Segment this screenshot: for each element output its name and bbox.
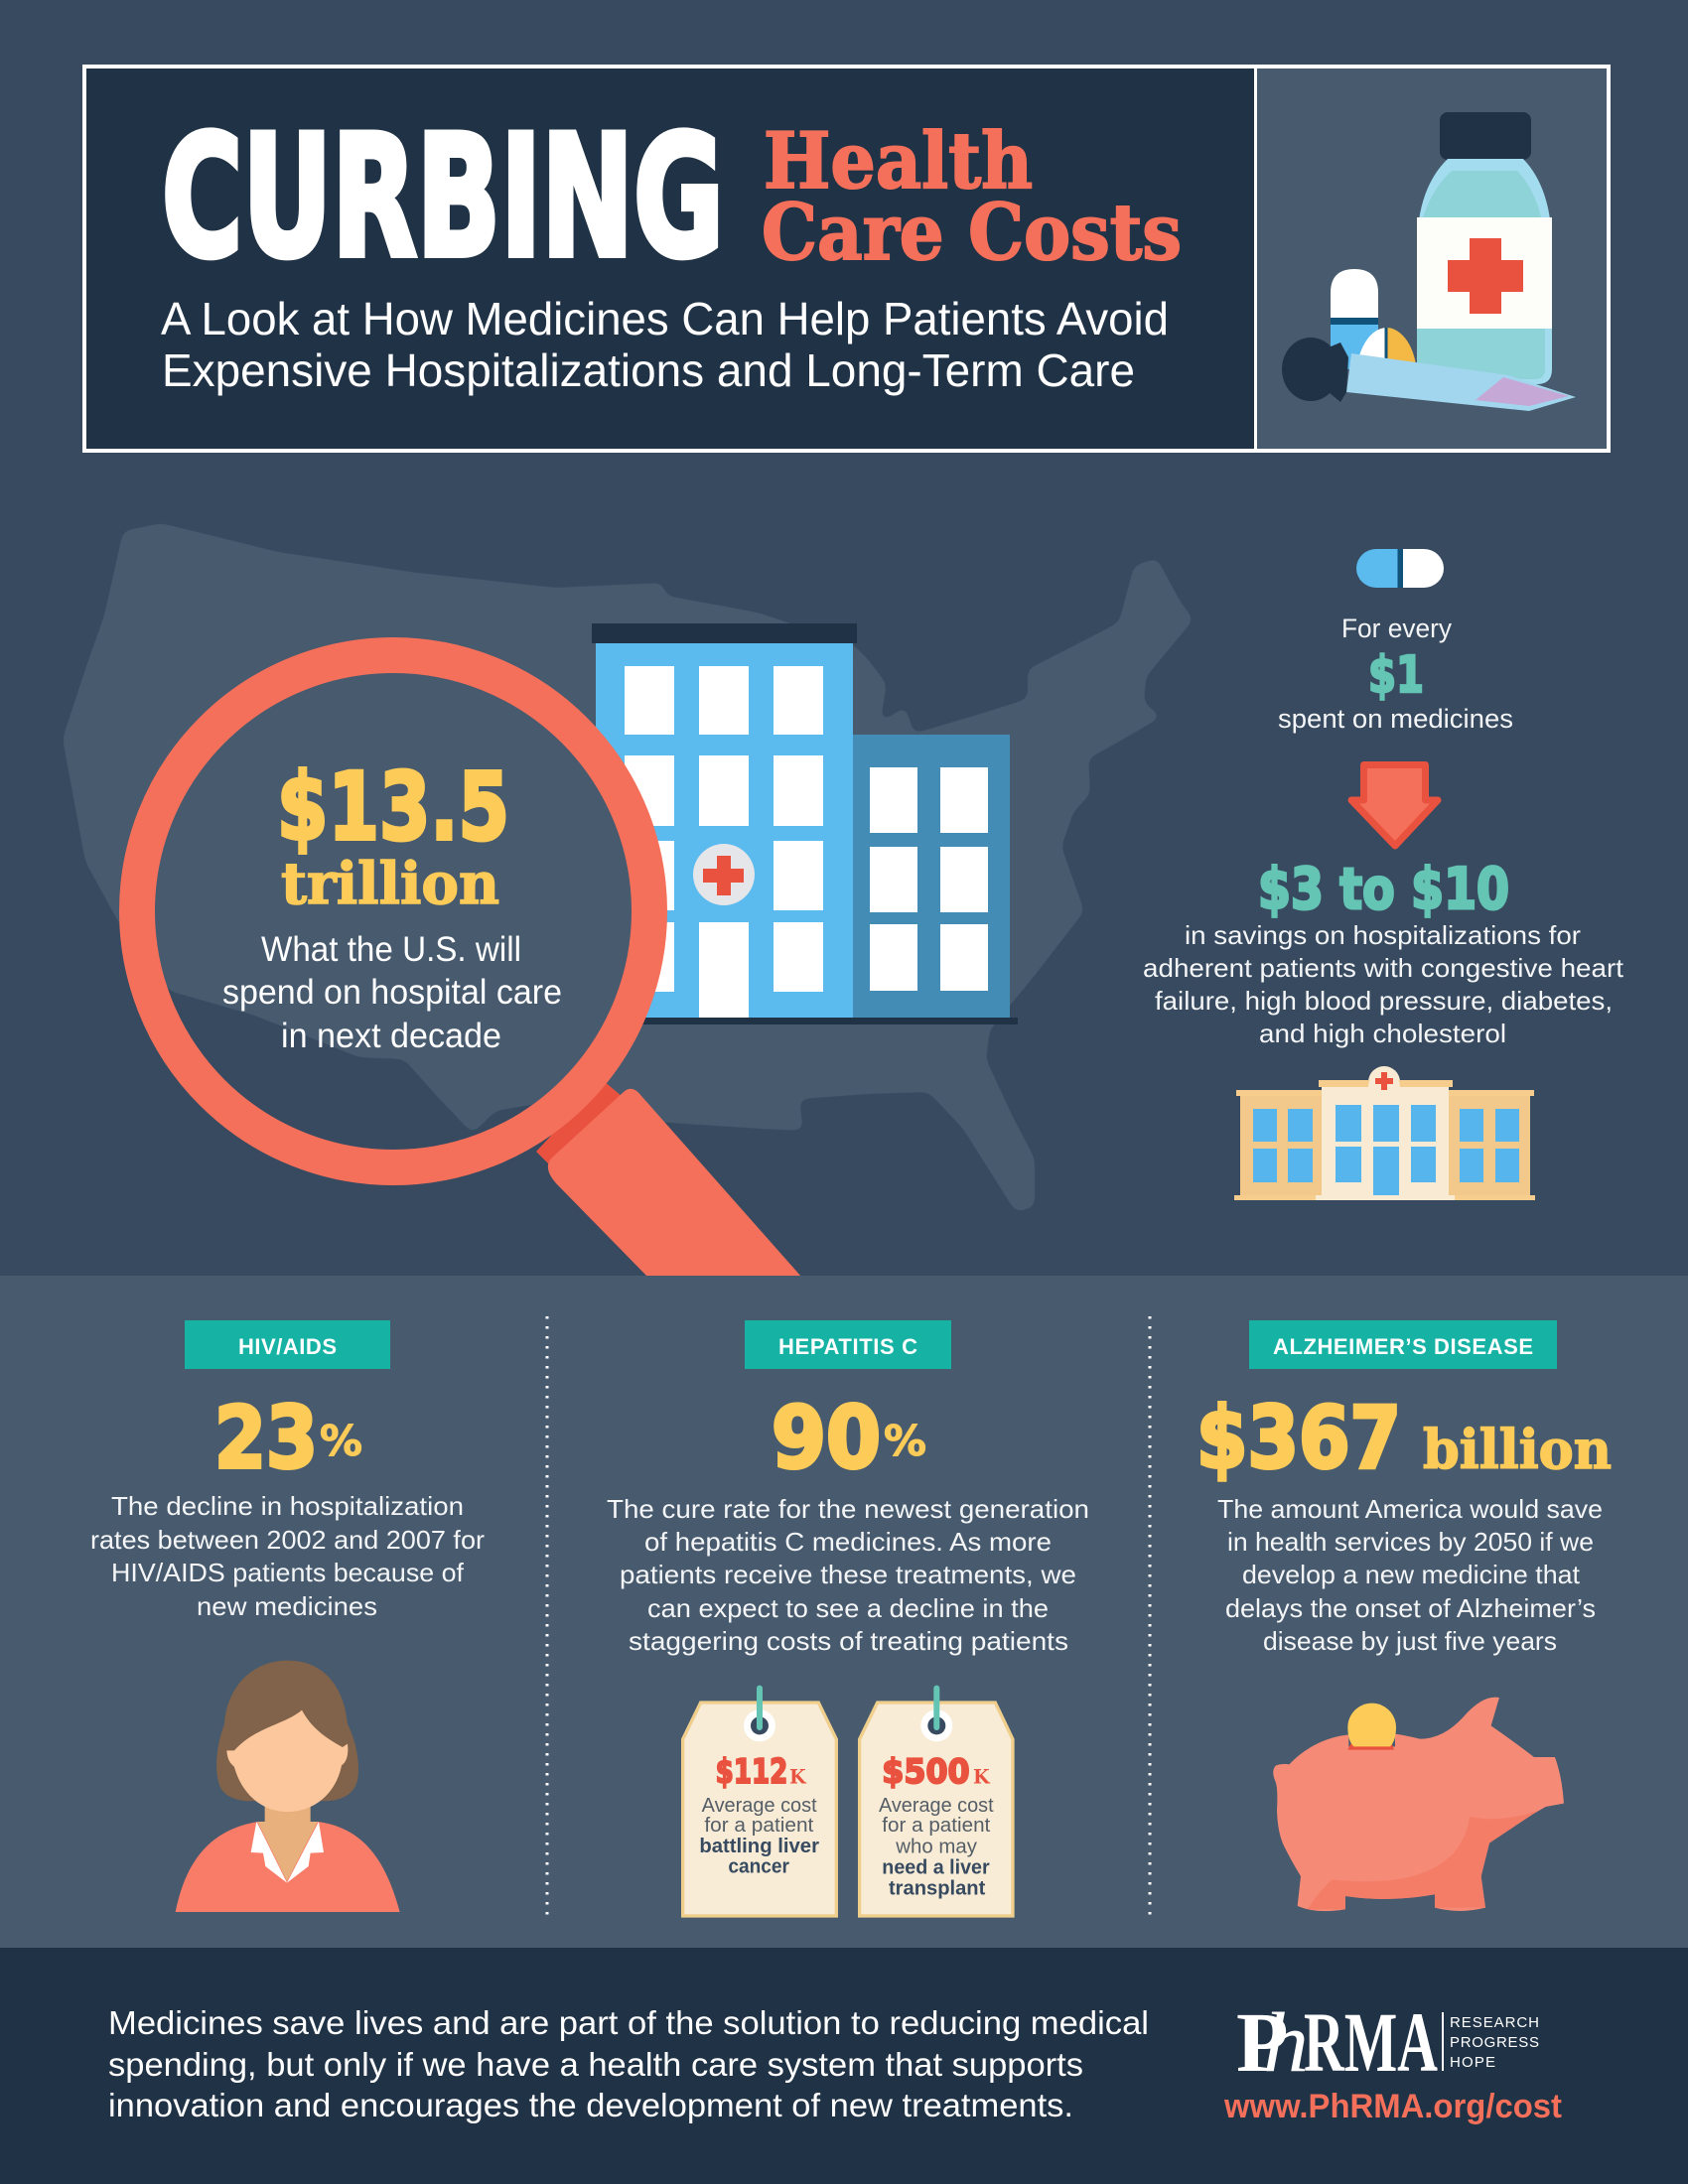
stat: 23 percent: % (320, 1417, 362, 1465)
text: hepatitis description: of hepatitis C medicines. As more (644, 1527, 1052, 1557)
subtitle (161, 293, 1169, 396)
text: savings description: and high cholesterol (1259, 1019, 1506, 1048)
panel: Alzheimer's disease (1196, 1320, 1612, 1911)
icon: piggy bank (1273, 1698, 1564, 1911)
stat: 13.5 trillion: $13.5 (277, 753, 509, 862)
arrow: down (1351, 764, 1438, 846)
price tag: 500K: K (973, 1766, 991, 1789)
text: Alzheimer's description: delays the onset of Alzheimer’s (1225, 1593, 1596, 1623)
title: health care costs (762, 116, 1182, 278)
panel: savings on medicines (1143, 549, 1624, 1200)
price tag: 500K (860, 1689, 1013, 1916)
title: curbing: CURBING (162, 99, 724, 294)
text: for every 1 dollar: For every (1341, 614, 1452, 643)
title: health care costs: Care Costs (762, 188, 1182, 278)
price tag: 112K: cancer (728, 1855, 789, 1878)
text: hepatitis description: patients receive these treatments, we (620, 1560, 1076, 1589)
price tag: 500K: transplant (889, 1876, 985, 1899)
text: hepatitis description: can expect to see a decline in the (647, 1593, 1049, 1623)
stat: 3 to 10 dollars: $3 to $10 (1258, 857, 1509, 922)
price tag: 112K: $112 (716, 1752, 787, 1792)
icon: capsule (1356, 549, 1444, 588)
text: Alzheimer's description (1217, 1494, 1603, 1656)
icon: magnifying glass (119, 637, 800, 1276)
title: health care costs: Health (764, 116, 1033, 206)
stat: 13.5 trillion: trillion (281, 850, 499, 917)
subtitle: Expensive Hospitalizations and Long-Term Care (162, 344, 1135, 396)
price tag: 112K: for a patient (704, 1814, 814, 1837)
header title background (84, 67, 1609, 451)
stat: 13.5 trillion: What the U.S. will (261, 930, 521, 969)
stat: 367 billion (1196, 1389, 1612, 1488)
text: HIV description: rates between 2002 and 2007 for (90, 1525, 485, 1555)
price tag: 112K: K (789, 1766, 807, 1789)
icon: woman patient (176, 1661, 400, 1912)
header frame (84, 67, 1609, 451)
stat: 90 percent: 90 (772, 1389, 881, 1488)
stat: 13.5 trillion (222, 753, 562, 1055)
stat: 13.5 trillion: spend on hospital care (222, 973, 562, 1012)
text: HIV description: new medicines (197, 1591, 377, 1621)
stat: 13.5 trillion: in next decade (281, 1017, 501, 1055)
panel: disease statistics band (0, 1276, 1688, 1948)
price tag: 500K: who may (895, 1836, 978, 1858)
subtitle: A Look at How Medicines Can Help Patients Avoid (161, 293, 1169, 344)
logo: PhRMA: RMA (1304, 1994, 1438, 2090)
icon: hospital building (584, 623, 1018, 1024)
text: HIV description (90, 1491, 485, 1621)
logo: PhRMA: PROGRESS (1450, 2034, 1539, 2051)
text: hepatitis description: staggering costs of treating patients (629, 1626, 1068, 1656)
text: hepatitis description (607, 1494, 1089, 1656)
header illustration background (1255, 67, 1609, 451)
label: hepatitis C: HEPATITIS C (778, 1334, 917, 1359)
logo: PhRMA: P (1236, 1994, 1289, 2090)
price tag: 112K (683, 1689, 836, 1916)
price tag: 500K: $500 (882, 1752, 970, 1792)
panel: footer (0, 1948, 1688, 2184)
text: HIV description: HIV/AIDS patients because of (111, 1558, 465, 1587)
stat: 90 percent: % (884, 1417, 926, 1465)
text: HIV description: The decline in hospitalization (111, 1491, 464, 1521)
label: hepatitis C (745, 1320, 951, 1369)
text: savings description: adherent patients with congestive heart (1143, 953, 1624, 983)
price tag: 500K: Average cost (879, 1794, 994, 1817)
text: Alzheimer's description: disease by just five years (1263, 1626, 1557, 1656)
logo: PhRMA (1236, 1994, 1539, 2090)
icon: medicine bottle and pills (1282, 112, 1576, 411)
stat: 367 billion: $367 (1196, 1389, 1401, 1488)
logo: PhRMA: RESEARCH (1450, 2014, 1539, 2031)
price tag: 500K: for a patient (882, 1814, 991, 1837)
text: closing statement: spending, but only if we have a health care system that supports (108, 2046, 1083, 2083)
map of the United States (63, 523, 1194, 1212)
logo: PhRMA: HOPE (1450, 2054, 1495, 2071)
text: for every 1 dollar: $1 (1368, 646, 1424, 705)
price tag: 500K: need a liver (882, 1855, 990, 1878)
label: HIV/AIDS (185, 1320, 390, 1369)
panel: header (84, 67, 1609, 451)
text: for every 1 dollar (1278, 614, 1513, 734)
logo: PhRMA: h (1263, 1994, 1309, 2090)
text: closing statement: innovation and encourages the development of new treatments. (108, 2087, 1073, 2123)
stat: 23 percent: 23 (214, 1389, 318, 1488)
label: Alzheimer's disease (1249, 1320, 1557, 1369)
text: Alzheimer's description: in health services by 2050 if we (1227, 1527, 1594, 1557)
panel: hepatitis C (607, 1320, 1089, 1916)
icon: small hospital (1234, 1066, 1535, 1200)
text: Alzheimer's description: The amount America would save (1217, 1494, 1603, 1524)
text: for every 1 dollar: spent on medicines (1278, 704, 1513, 734)
text: hepatitis description: The cure rate for the newest generation (607, 1494, 1089, 1524)
panel: HIV/AIDS (90, 1320, 485, 1912)
stat: 367 billion: billion (1423, 1418, 1612, 1481)
text: savings description: in savings on hospitalizations for (1185, 920, 1581, 950)
text: savings description: failure, high blood pressure, diabetes, (1155, 986, 1613, 1016)
label: HIV/AIDS: HIV/AIDS (238, 1334, 337, 1359)
text: savings description (1143, 920, 1624, 1048)
link: website: www.PhRMA.org/cost (1223, 2088, 1562, 2125)
price tag: 112K: Average cost (702, 1794, 817, 1817)
text: closing statement (108, 2004, 1149, 2123)
text: closing statement: Medicines save lives and are part of the solution to reducing medical (108, 2004, 1149, 2041)
label: Alzheimer's disease: ALZHEIMER’S DISEASE (1273, 1334, 1533, 1359)
price tag: 112K: battling liver (699, 1835, 819, 1857)
text: Alzheimer's description: develop a new medicine that (1242, 1560, 1581, 1589)
